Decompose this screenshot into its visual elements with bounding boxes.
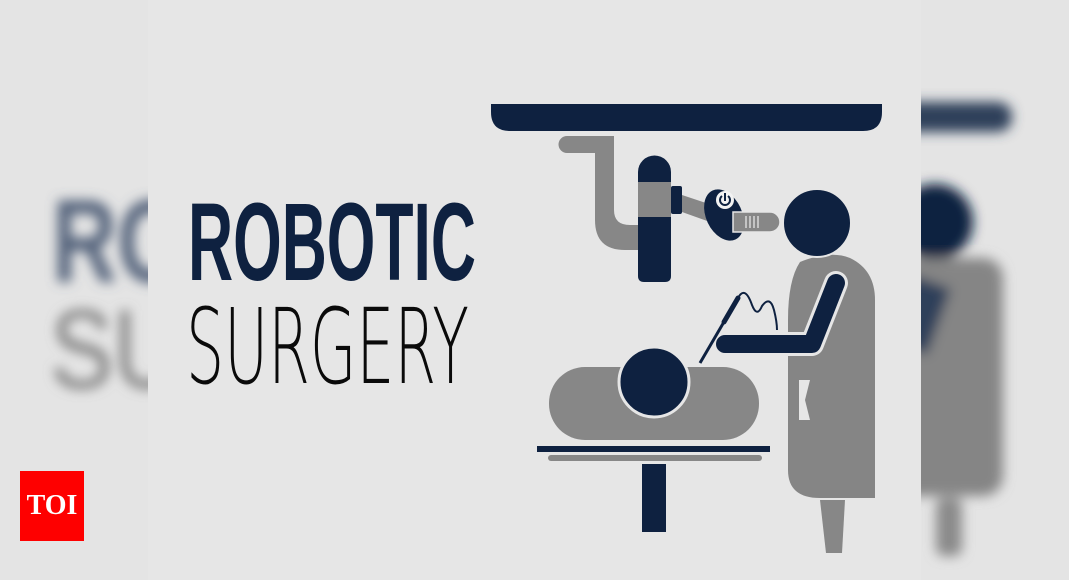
robot cylinder [638,156,712,282]
illustration: robotic surgery [491,104,882,553]
TOI logo: TOI [27,490,77,521]
operating table [537,446,770,532]
surgeon [725,189,875,553]
robot camera head [696,183,780,247]
ceiling bar [491,104,882,131]
title: ROBOTIC: ROBOTIC [188,181,476,304]
patient [549,347,759,440]
blurred background left [49,191,148,397]
blurred background right [921,92,1022,564]
surgical instrument [700,293,777,363]
TOI logo [20,471,84,541]
blurred background left: ROB [52,176,252,308]
main panel [148,0,921,580]
robot arm mount [558,136,640,250]
blurred background left: SUR [50,287,250,412]
subtitle: SURGERY: SURGERY [186,286,469,408]
